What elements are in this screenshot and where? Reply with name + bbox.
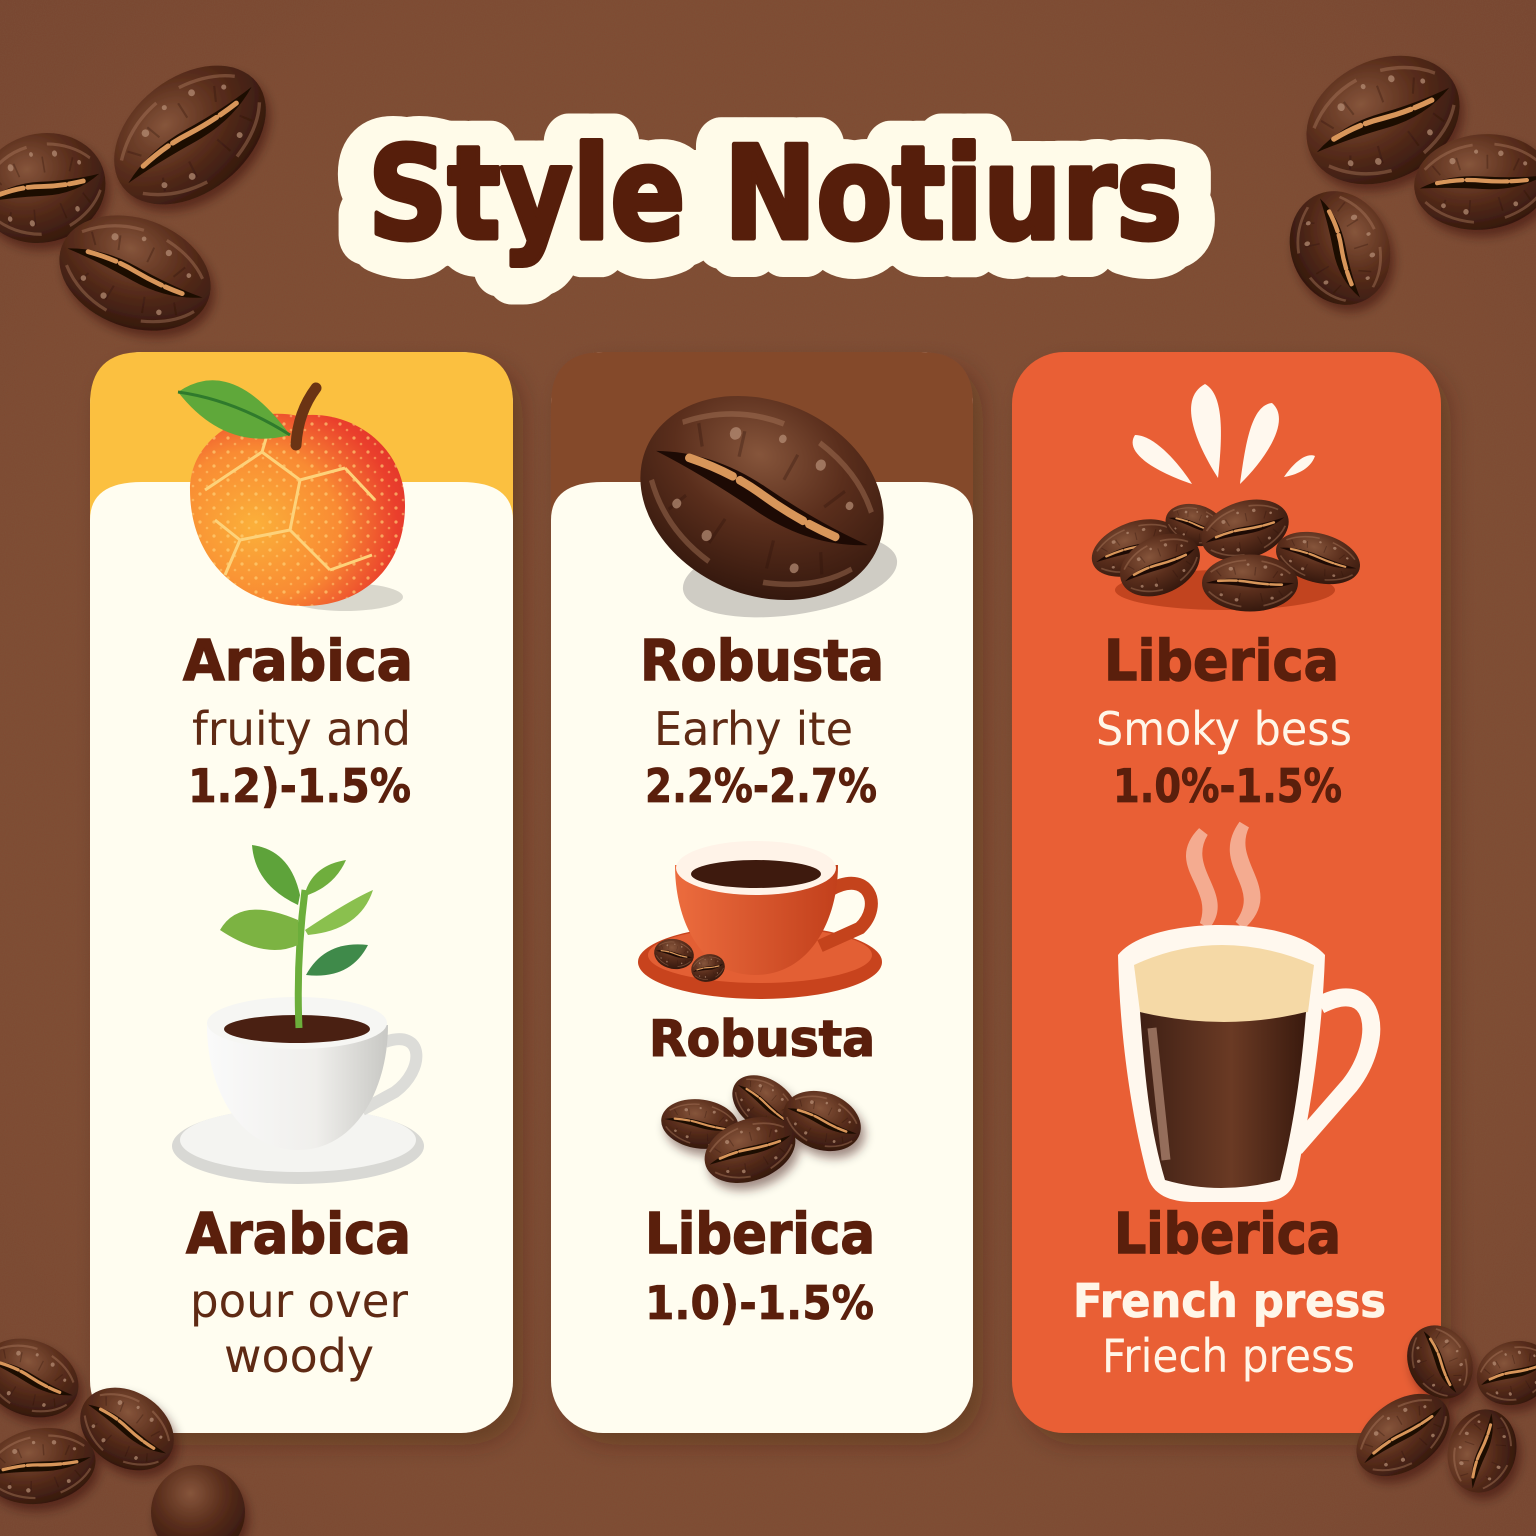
icon: large coffee bean <box>608 359 916 637</box>
title: Style Notiurs <box>368 120 1182 269</box>
icon: seedling in cup <box>172 845 424 1184</box>
heading: Arabica <box>186 1202 411 1267</box>
icon: pile of beans <box>1084 489 1366 612</box>
caffeine: 2.2%-2.7% <box>645 759 877 813</box>
heading: Liberica <box>645 1202 875 1267</box>
heading: Liberica <box>1104 629 1339 694</box>
brew method, bold: French press <box>1073 1274 1386 1328</box>
beans: top left cluster <box>0 37 293 351</box>
heading: Robusta <box>640 629 884 694</box>
flavour: fruity and <box>192 702 411 756</box>
flavour: woody <box>224 1329 374 1383</box>
caffeine: 1.0%-1.5% <box>1113 759 1342 813</box>
panel: Liberica <box>1012 352 1441 1433</box>
panel background <box>1012 352 1441 1433</box>
beans: bottom left cluster <box>0 1325 245 1536</box>
brew method: pour over <box>190 1274 408 1328</box>
caffeine: 1.0)-1.5% <box>645 1276 874 1330</box>
title: Style Notiurs <box>368 130 1182 279</box>
icon: glass mug <box>1118 925 1371 1202</box>
beans: top right cluster <box>1273 31 1536 320</box>
icon: coffee beans <box>658 1063 869 1195</box>
title: Style Notiurs <box>355 122 1169 271</box>
panel: Arabica <box>90 352 513 1433</box>
panel background <box>551 352 973 1433</box>
icon: peach <box>178 380 405 611</box>
label: Robusta <box>649 1010 875 1068</box>
brew method, regular: Friech press <box>1102 1329 1355 1383</box>
flavour: Smoky bess <box>1096 702 1352 756</box>
icon: orange cup with saucer <box>638 841 882 999</box>
beans: bottom right cluster <box>1341 1314 1536 1500</box>
icon: splash rays <box>1133 384 1315 484</box>
title: Style Notiurs <box>381 122 1195 271</box>
heading: Arabica <box>183 629 413 694</box>
flavour: Earhy ite <box>654 702 853 756</box>
panel: Robusta <box>551 352 973 1433</box>
panel background <box>90 352 513 1433</box>
heading: Liberica <box>1114 1202 1341 1267</box>
caffeine: 1.2)-1.5% <box>188 759 411 813</box>
icon: steam <box>1191 825 1255 925</box>
